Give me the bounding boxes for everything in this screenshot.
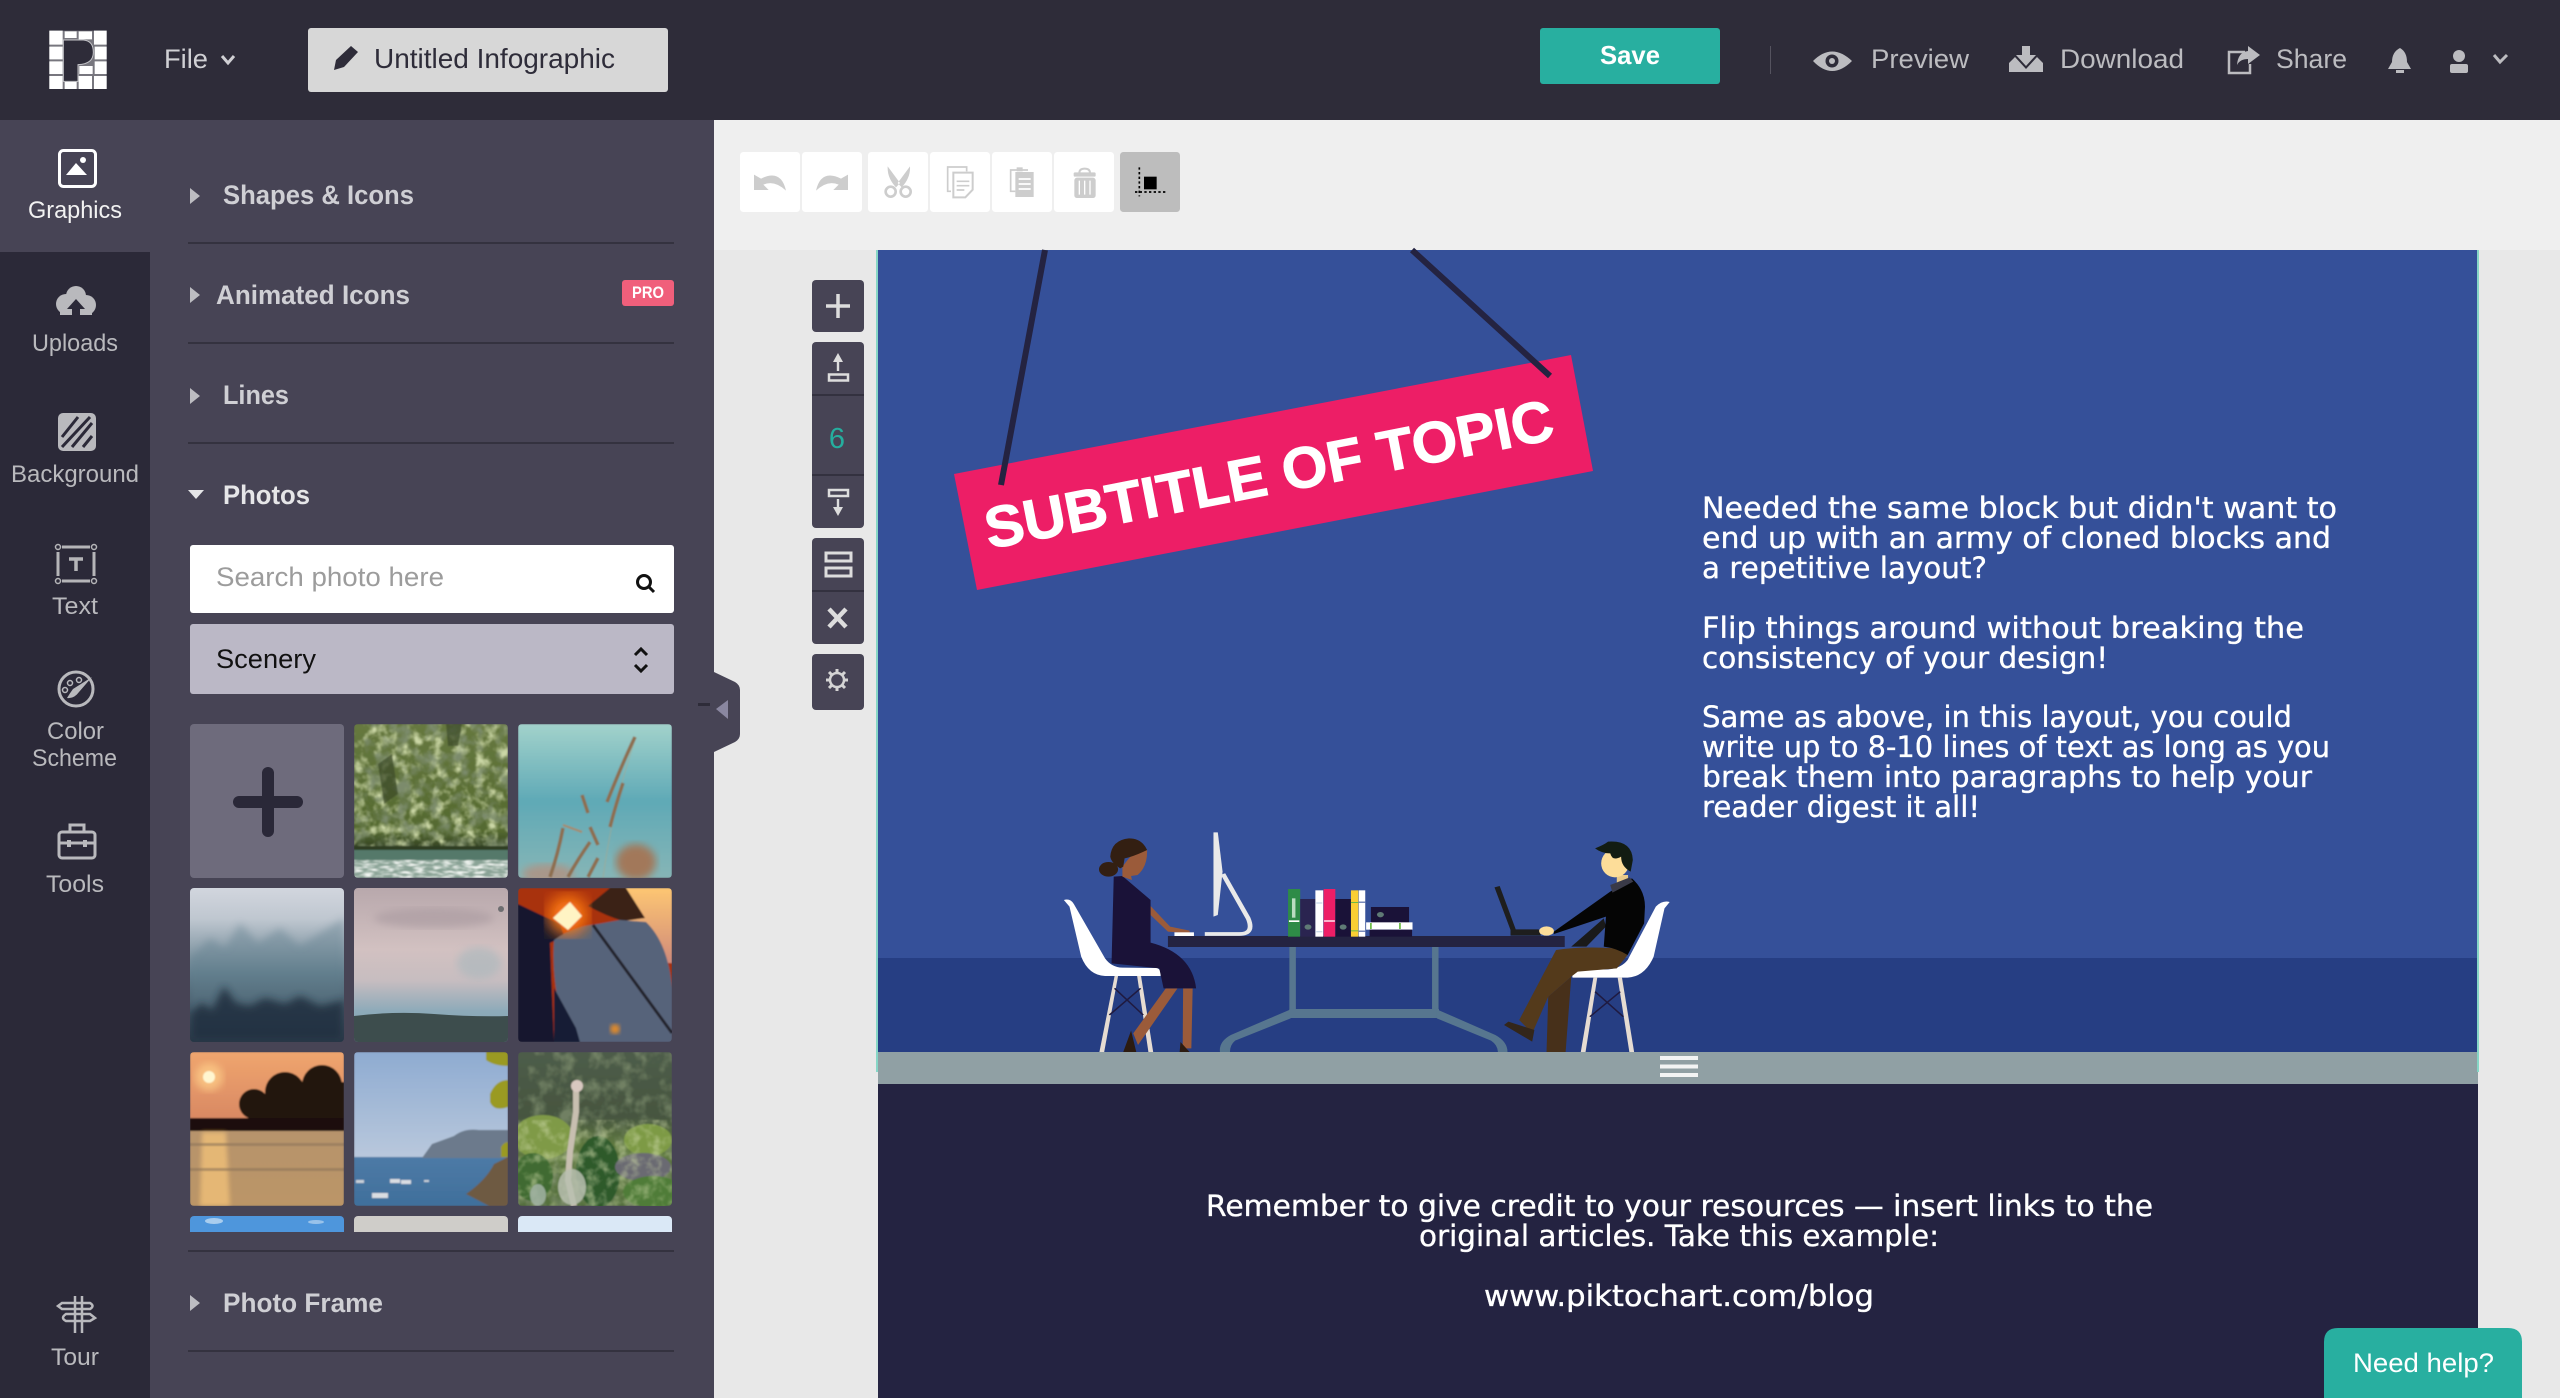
credit text: Remember to give credit to your resources — insert links to the [1206,1189,2153,1223]
photo: grass against teal sky [518,724,672,884]
undo button [740,152,800,212]
tour tab [51,1296,99,1371]
subtitle banner: SUBTITLE OF TOPIC [979,388,1559,562]
body text: reader digest it all! [1702,790,1980,824]
photo: misty forest [190,888,344,1042]
credit text [1206,1189,2153,1313]
add photo tile [190,724,344,878]
collapse handle [698,672,740,752]
left icon rail [0,120,150,1398]
photo: backlit hiker [518,888,672,1042]
tools tab [46,825,104,898]
body text: end up with an army of cloned blocks and [1702,521,2331,555]
shapes and icons row: Shapes & Icons [223,180,414,210]
preview action: Preview [1871,44,1970,74]
uploads tab [32,286,118,357]
document title field [308,28,668,92]
move block group: 6 [829,423,845,455]
credit text: www.piktochart.com/blog [1484,1279,1874,1313]
woman's chair [1064,899,1161,1052]
infographic canvas [877,250,2478,1398]
category dropdown: Scenery [216,644,316,674]
duplicate and delete group [812,538,864,644]
photo: hillside flower [518,1052,672,1206]
copy button [930,152,990,212]
man [1504,842,1645,1052]
photo: bay with boats [354,1052,508,1206]
body text: break them into paragraphs to help your [1702,760,2312,794]
binders and books [1288,889,1413,937]
floor band [878,958,2478,1052]
background tab: Background [11,461,139,488]
body text: Flip things around without breaking the [1702,611,2304,645]
share action [2229,44,2347,74]
block side tools [812,280,864,710]
snap toggle button [1120,152,1180,212]
photo: cloudy coast [354,888,508,1042]
subtitle banner [954,250,1593,590]
separator [1770,46,1771,74]
credit text: original articles. Take this example: [1419,1219,1939,1253]
photo search field [190,545,674,613]
photos row [188,480,310,510]
graphics tab [0,120,150,252]
woman [1099,838,1196,1052]
keyboard and monitor [1174,832,1250,936]
lines row: Lines [223,380,289,410]
photo frame row: Photo Frame [223,1288,383,1318]
add block button [812,280,864,332]
photo: blue sky peek [190,1216,344,1232]
photo: pale sky peek [518,1216,672,1232]
text tab [52,544,98,620]
color scheme tab: Color [47,718,104,745]
animated icons row: PRO [632,283,664,302]
move block group [812,342,864,528]
tools tab: Tools [46,871,104,898]
block handle bar [878,1052,2478,1084]
graphics tab: Graphics [28,197,122,224]
share action: Share [2276,44,2347,74]
save button: Save [1600,40,1660,70]
body text [1702,491,2337,824]
photos row: Photos [223,480,310,510]
photo: forest and river [354,724,508,878]
cut button [868,152,928,212]
download action [2009,44,2184,74]
logo [49,31,107,89]
editing toolbar strip [714,120,2560,250]
laptop [1494,886,1541,936]
color scheme tab: Scheme [32,745,117,772]
body text: consistency of your design! [1702,641,2108,675]
body text: write up to 8-10 lines of text as long as you [1702,730,2330,764]
save button [1540,28,1720,84]
background tab [11,413,139,488]
redo button [802,152,862,212]
file menu: File [164,44,208,74]
preview action [1813,44,1970,74]
man's chair [1572,902,1670,1052]
settings button [812,654,864,710]
animated icons row [190,280,674,310]
photo: sunset over water [190,1052,344,1206]
file menu [164,44,234,74]
category dropdown [190,624,674,694]
text tab: Text [52,593,98,620]
body text: Same as above, in this layout, you could [1702,700,2292,734]
animated icons row: Animated Icons [216,280,410,310]
photo search field: Search photo here [216,562,444,592]
lines row [190,380,289,410]
need help button [2324,1328,2522,1398]
tour tab: Tour [51,1344,99,1371]
body text: Needed the same block but didn't want to [1702,491,2337,525]
graphics panel [150,120,740,1398]
user menu [2450,50,2507,73]
top navigation bar [0,0,2560,120]
delete button [1054,152,1114,212]
photo: grey peek [354,1216,508,1232]
uploads tab: Uploads [32,330,118,357]
next block background [878,1084,2478,1398]
paste button [992,152,1052,212]
table [1168,936,1565,1052]
illustration: two people at a table [1064,832,1670,1052]
need help button: Need help? [2353,1348,2494,1378]
document title field: Untitled Infographic [374,43,615,74]
body text: a repetitive layout? [1702,551,1987,585]
canvas edge guides [877,250,2478,1072]
canvas block background [878,250,2478,958]
notification bell [2388,48,2411,73]
color scheme tab [32,672,117,772]
download action: Download [2060,44,2184,74]
